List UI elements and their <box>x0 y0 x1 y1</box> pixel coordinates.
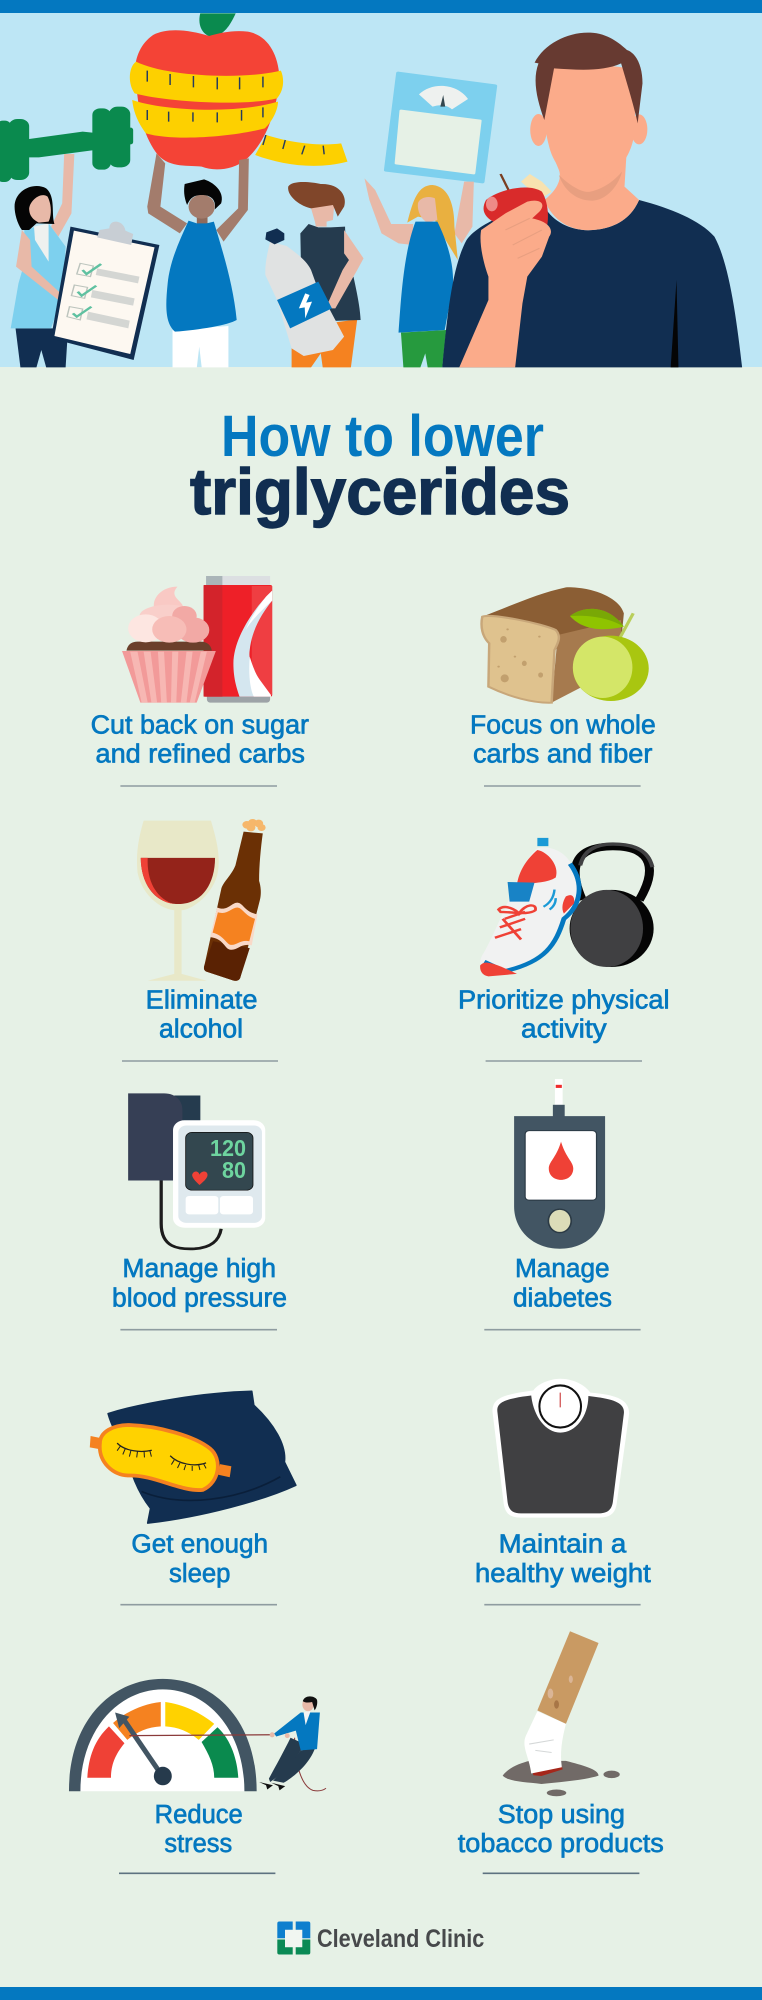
item: prioritize physical activity <box>458 838 670 1061</box>
label: sleep <box>169 1560 230 1588</box>
title <box>190 404 570 528</box>
label <box>91 711 310 769</box>
label: blood pressure <box>112 1284 287 1312</box>
icon: stress gauge with woman pulling rope <box>69 1679 326 1791</box>
logo: Cleveland Clinic <box>277 1922 484 1954</box>
icon: cupcake and soda can <box>122 576 272 703</box>
label: alcohol <box>159 1016 243 1044</box>
item: eliminate alcohol <box>122 819 278 1061</box>
label <box>155 1801 243 1858</box>
label: diabetes <box>513 1284 612 1312</box>
icon: blood pressure monitor <box>128 1093 265 1249</box>
label <box>458 986 670 1044</box>
label: Prioritize physical <box>458 986 670 1014</box>
label: Maintain a <box>499 1531 627 1559</box>
woman with clipboard <box>11 154 159 367</box>
label: Focus on whole <box>470 711 656 739</box>
hero illustration banner <box>0 13 762 367</box>
label <box>458 1801 664 1858</box>
icon: wine glass and beer bottle <box>137 819 266 981</box>
label: Manage <box>515 1255 610 1283</box>
item: stop using tobacco products <box>458 1631 664 1873</box>
title: triglycerides <box>190 455 570 528</box>
item: focus on whole carbs and fiber <box>470 587 656 786</box>
item: cut back on sugar and refined carbs <box>91 576 310 786</box>
icon: running shoe and kettlebell <box>480 838 654 976</box>
label: healthy weight <box>475 1560 651 1588</box>
title: How to lower <box>221 404 544 469</box>
icon: blood pressure monitor: 120 <box>210 1135 246 1161</box>
icon: glucose meter <box>514 1079 605 1249</box>
icon: bathroom scale <box>492 1379 629 1518</box>
person holding water bottle <box>265 182 364 367</box>
label: Get enough <box>131 1531 268 1559</box>
label: Stop using <box>498 1801 625 1829</box>
label <box>131 1531 268 1588</box>
man lifting apple <box>147 153 249 367</box>
label: Reduce <box>155 1801 243 1829</box>
icon: stubbed cigarette <box>503 1631 620 1796</box>
icon: pillow and sleep mask <box>90 1391 296 1523</box>
label: activity <box>521 1016 607 1044</box>
label <box>146 986 258 1044</box>
label <box>112 1255 287 1312</box>
woman holding scale <box>365 73 495 367</box>
label: and refined carbs <box>96 741 305 769</box>
bottom blue bar <box>0 1987 762 2000</box>
item: get enough sleep <box>90 1391 296 1605</box>
icon: bread and green apple <box>482 587 649 703</box>
item: manage high blood pressure <box>112 1093 287 1330</box>
item: manage diabetes <box>484 1079 641 1330</box>
label <box>475 1531 651 1588</box>
label: Eliminate <box>146 986 258 1014</box>
icon: apple with measuring tape <box>130 13 347 169</box>
icon: green dumbbell <box>0 107 133 182</box>
item: reduce stress <box>69 1679 326 1873</box>
icon: blood pressure monitor: 80 <box>222 1157 246 1183</box>
logo: Cleveland Clinic: Cleveland Clinic <box>317 1925 484 1953</box>
label: tobacco products <box>458 1830 664 1858</box>
label: carbs and fiber <box>473 741 653 769</box>
label: Cut back on sugar <box>91 711 310 739</box>
label: Manage high <box>122 1255 276 1283</box>
man eating apple <box>442 33 742 367</box>
icon: Cleveland Clinic cross mark <box>277 1922 310 1954</box>
top blue bar <box>0 0 762 13</box>
item: maintain a healthy weight <box>475 1379 651 1605</box>
label <box>470 711 656 769</box>
label: stress <box>164 1830 232 1858</box>
label <box>513 1255 612 1312</box>
